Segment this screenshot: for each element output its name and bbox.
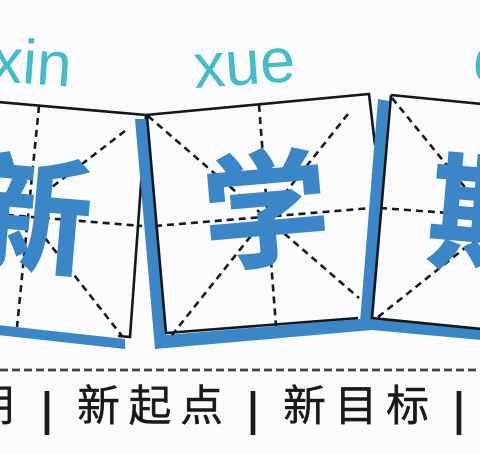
character: xue: 学 [197, 137, 335, 289]
box blue edge [360, 99, 480, 340]
box guide lines [0, 102, 146, 337]
dashed separator [0, 369, 480, 371]
slogan: new goal: 新目标 [283, 383, 438, 431]
divider: | [247, 383, 259, 435]
pinyin: xue: xue [191, 25, 297, 102]
panel: character box xin [0, 102, 146, 349]
box blue edge [0, 325, 125, 349]
divider: | [453, 383, 465, 435]
box blue edge [135, 119, 372, 349]
divider: | [41, 383, 53, 435]
box guide lines [146, 94, 375, 335]
panel: character box qi [360, 95, 480, 340]
slogan text row [0, 383, 465, 435]
box guide lines [372, 95, 480, 329]
panel: character box xue [135, 94, 375, 349]
slogan: new starting point: 新起点 [77, 383, 232, 431]
pinyin labels [0, 24, 480, 102]
